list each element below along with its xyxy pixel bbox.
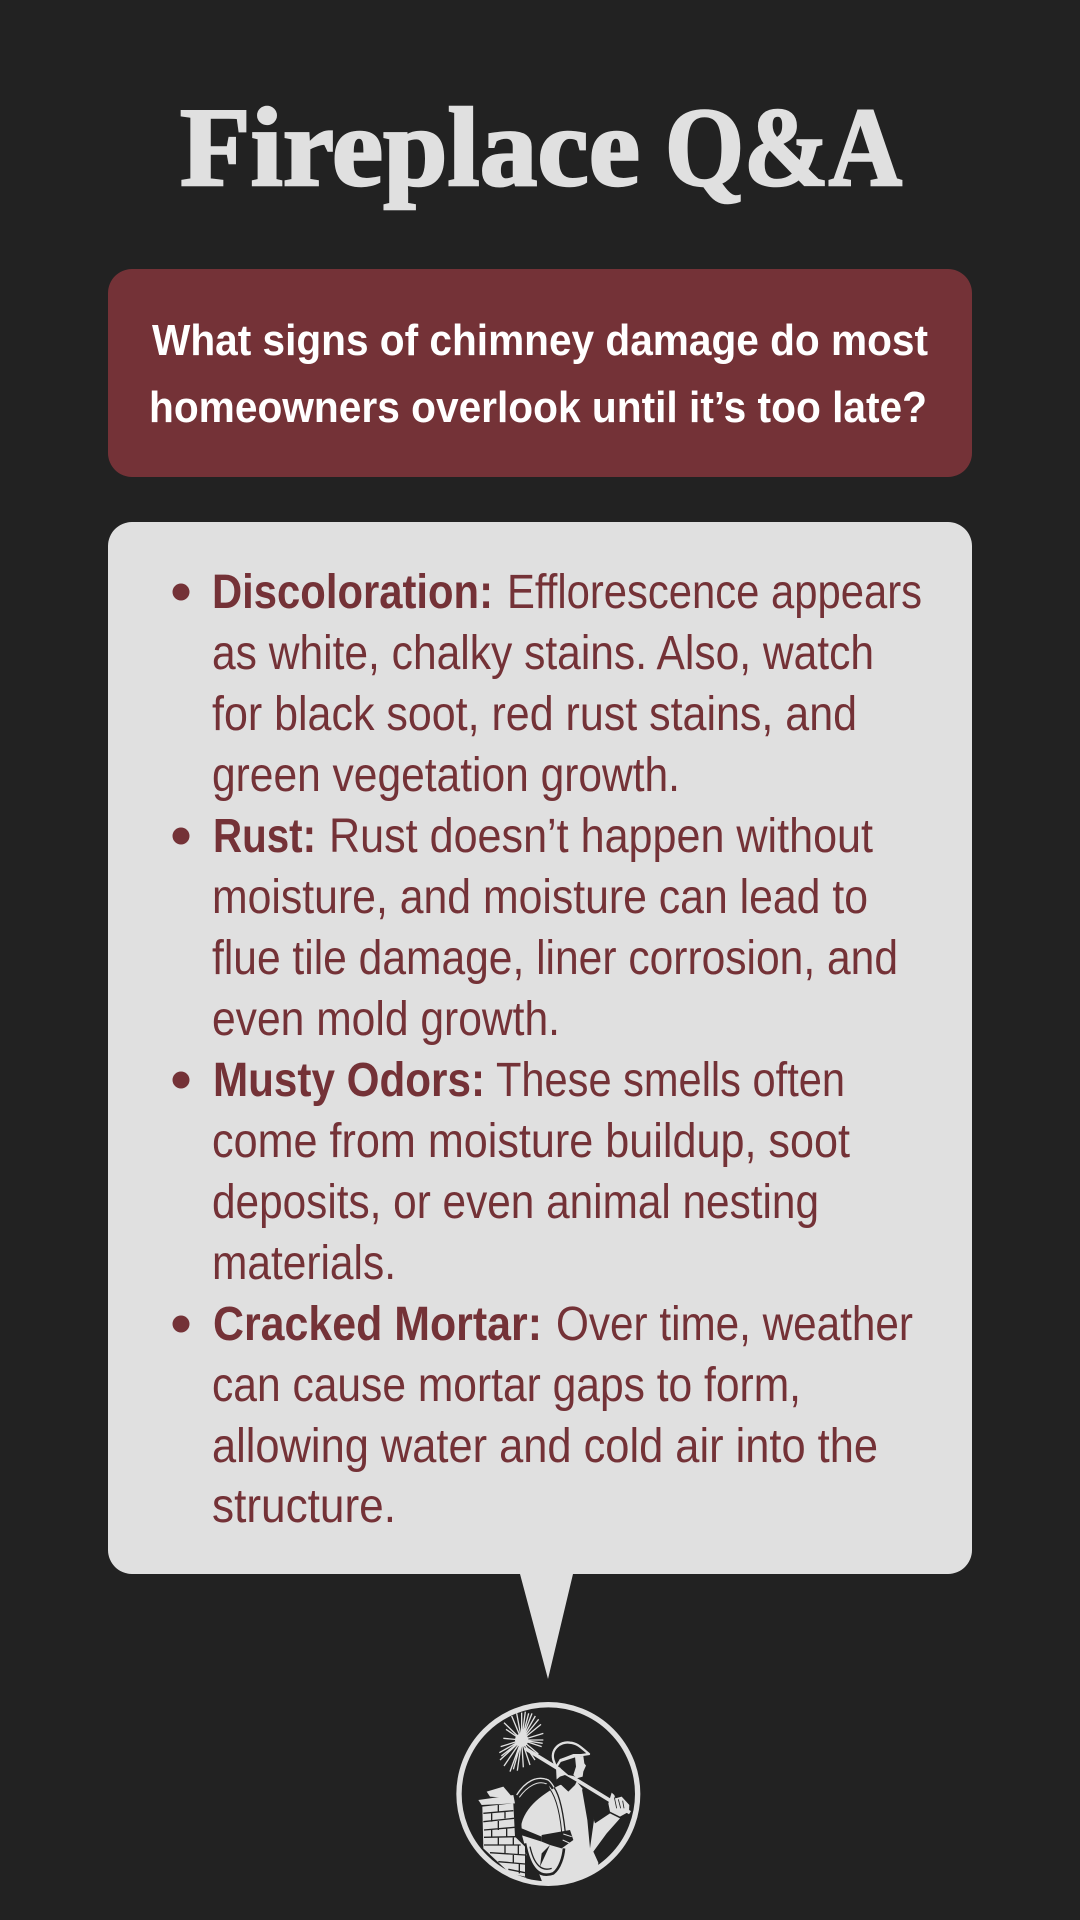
- panel: question: [108, 269, 972, 477]
- icon part: brush: [499, 1712, 543, 1772]
- panel: answer speech bubble: [108, 522, 972, 1679]
- list item: Rust: moisture, and moisture can lead to: [212, 871, 868, 924]
- list item: Discoloration: green vegetation growth.: [212, 749, 680, 802]
- list item: Cracked Mortar: [172, 1298, 913, 1533]
- icon part: coil strands: [517, 1778, 566, 1875]
- icon part: neck and collar: [556, 1767, 577, 1792]
- icon part: body: [521, 1782, 620, 1881]
- list item: Cracked Mortar: can cause mortar gaps to form,: [212, 1359, 801, 1412]
- icon part: hand on coil: [542, 1830, 573, 1848]
- list item: Rust: Rust doesn’t happen without: [329, 810, 873, 863]
- list item: Cracked Mortar: Over time, weather: [556, 1298, 913, 1351]
- list item: Musty Odors: materials.: [212, 1237, 396, 1290]
- list item: Discoloration: [172, 566, 922, 802]
- icon: chimney sweep logo: [459, 1705, 638, 1893]
- question text: homeowners overlook until it’s too late?: [149, 383, 927, 432]
- list item: Rust: even mold growth.: [212, 993, 560, 1046]
- question text: [149, 316, 928, 432]
- question text: What signs of chimney damage do most: [152, 316, 928, 365]
- list item: Musty Odors: come from moisture buildup, soot: [212, 1115, 850, 1168]
- icon part: chimney: [478, 1787, 525, 1877]
- list item: Cracked Mortar: allowing water and cold air into the: [212, 1420, 878, 1473]
- list item: Musty Odors: These smells often: [496, 1054, 845, 1107]
- icon part: shoulder band: [520, 1784, 550, 1842]
- icon part: hand on pole: [608, 1793, 629, 1817]
- list item: Musty Odors: [172, 1054, 850, 1290]
- title: Fireplace: [180, 86, 640, 210]
- icon part: strap shadow: [582, 1788, 594, 1848]
- icon part: lower coil shadow: [526, 1845, 550, 1882]
- list item: Cracked Mortar: structure.: [212, 1480, 396, 1533]
- list item: Musty Odors: deposits, or even animal nesting: [212, 1176, 819, 1229]
- icon part: pole: [525, 1748, 630, 1813]
- list item: Rust: [172, 810, 898, 1046]
- list item: Rust: Rust:: [213, 810, 316, 863]
- icon part: head and cap: [553, 1742, 589, 1778]
- list item: Discoloration: Efflorescence appears: [507, 566, 922, 619]
- list item: Rust: flue tile damage, liner corrosion, and: [212, 932, 898, 985]
- list item: Cracked Mortar: Cracked Mortar:: [213, 1298, 542, 1351]
- list item: Discoloration: as white, chalky stains. Also, watch: [212, 627, 874, 680]
- title: Q&A: [665, 86, 902, 210]
- list item: Discoloration: Discoloration:: [212, 566, 493, 619]
- list item: Musty Odors: Musty Odors:: [213, 1054, 485, 1107]
- title: [180, 86, 902, 210]
- list item: Discoloration: for black soot, red rust stains, and: [212, 688, 857, 741]
